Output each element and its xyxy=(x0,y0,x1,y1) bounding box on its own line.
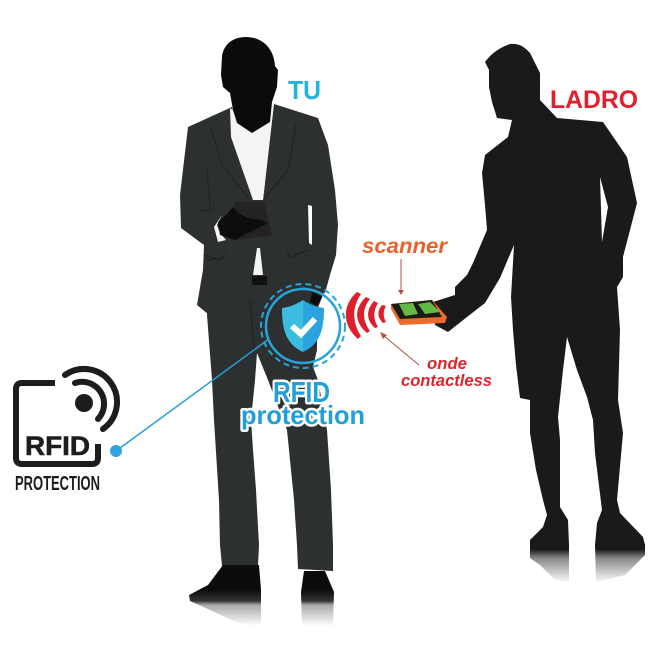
waist fill xyxy=(240,276,318,340)
arrow: waves xyxy=(380,332,419,365)
shield left xyxy=(282,300,303,352)
scanner device xyxy=(391,300,447,325)
hand in pocket xyxy=(310,292,322,306)
gap by arm xyxy=(308,205,312,245)
connector line and dot xyxy=(110,339,269,457)
lapel lines xyxy=(198,125,308,350)
shield badge xyxy=(261,284,345,368)
arrow: scanner xyxy=(398,259,404,295)
jacket xyxy=(180,104,338,315)
green screen xyxy=(399,303,418,316)
solid ring xyxy=(266,289,340,363)
inner arc xyxy=(75,382,104,419)
left shoe with reflection xyxy=(189,565,261,626)
label: scanner: scanner xyxy=(362,235,449,258)
hand xyxy=(218,207,267,240)
label: RFID protection xyxy=(241,377,365,430)
left foot reflection xyxy=(530,544,569,582)
lower shirt xyxy=(253,248,263,275)
shirt xyxy=(230,103,274,200)
black face xyxy=(391,300,442,319)
RFID protection icon xyxy=(15,369,117,495)
upper body and arm xyxy=(433,44,645,545)
dashed ring xyxy=(261,284,345,368)
right shoe with reflection xyxy=(301,571,334,626)
label: onde contactless: onde xyxy=(427,354,467,373)
figure: you (man in suit) xyxy=(180,37,338,626)
PROTECTION text: PROTECTION xyxy=(15,473,100,495)
trousers xyxy=(207,290,333,571)
cuff xyxy=(214,215,226,242)
head xyxy=(221,37,278,133)
contactless waves xyxy=(346,292,386,339)
keypad xyxy=(418,302,440,314)
label: onde contactless: contactless xyxy=(401,371,492,390)
orange body xyxy=(391,300,447,325)
RFID text: RFID xyxy=(25,431,90,461)
outer arc xyxy=(65,369,117,429)
check mark xyxy=(292,319,315,334)
label: RFID protection: protection xyxy=(241,400,365,430)
figure: thief silhouette xyxy=(433,44,645,582)
tablet xyxy=(235,202,272,240)
right foot reflection xyxy=(595,544,645,582)
label: onde contactless xyxy=(401,354,492,390)
label: TU: TU xyxy=(288,75,321,105)
card frame xyxy=(16,383,98,464)
signal dot xyxy=(75,394,93,412)
shield right xyxy=(303,300,324,352)
label: LADRO: LADRO xyxy=(550,86,638,114)
belt xyxy=(252,276,267,285)
label: RFID protection: RFID xyxy=(273,377,330,409)
